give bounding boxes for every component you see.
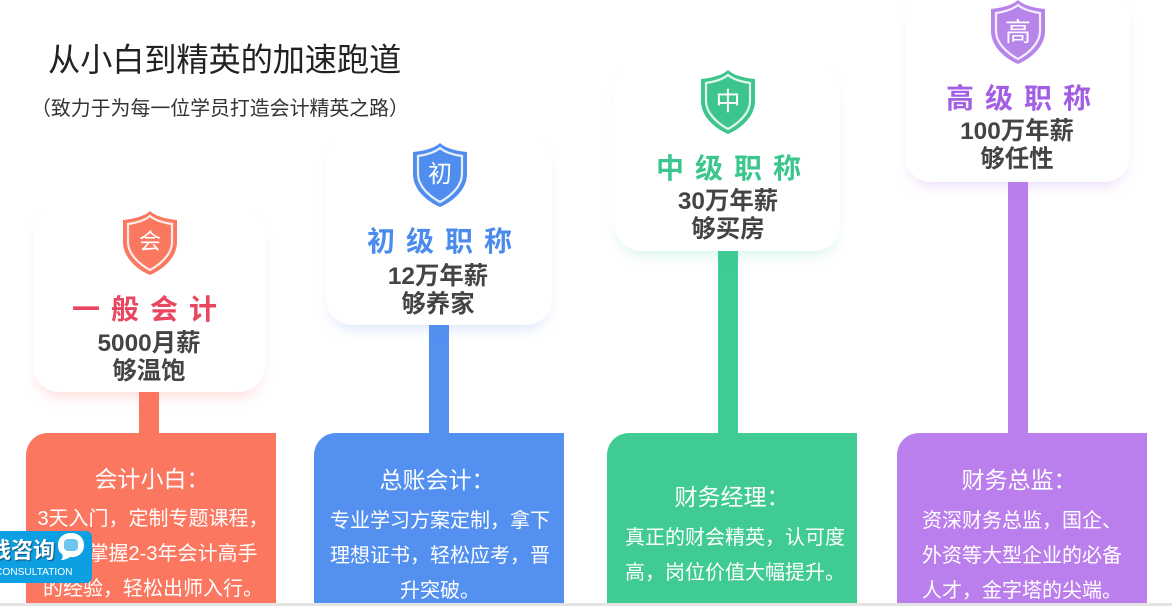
subtitle: （致力于为每一位学员打造会计精英之路） bbox=[31, 98, 409, 120]
card: 一般会计 bbox=[33, 205, 265, 392]
salary: 12万年薪 够养家: 够养家 bbox=[401, 291, 475, 318]
panel text: 快速掌握2-3年会计高手 bbox=[49, 543, 257, 565]
icon: shield 高 bbox=[991, 0, 1045, 64]
icon: shield 会 bbox=[123, 211, 177, 275]
panel text: 的经验，轻松出师入行。 bbox=[43, 578, 263, 600]
panel text: 人才，金字塔的尖端。 bbox=[922, 580, 1122, 602]
icon: speech bubble bbox=[58, 533, 84, 560]
card: 初级职称 bbox=[326, 135, 552, 325]
salary: 100万年薪 够任性: 够任性 bbox=[980, 146, 1054, 173]
icon: shield 高: 高 bbox=[1005, 17, 1031, 47]
panel text: 真正的财会精英，认可度 bbox=[625, 527, 845, 549]
bottom strip bbox=[0, 603, 1172, 606]
salary: 30万年薪 够买房: 30万年薪 bbox=[678, 188, 778, 215]
salary: 30万年薪 够买房: 够买房 bbox=[691, 216, 765, 243]
salary: 100万年薪 够任性 bbox=[960, 118, 1074, 173]
panel: 总账会计 bbox=[314, 433, 564, 603]
connector: 中级职称 bbox=[718, 245, 738, 435]
salary: 5000月薪 够温饱: 够温饱 bbox=[112, 358, 186, 385]
icon: shield 中: 中 bbox=[715, 88, 741, 116]
salary: 5000月薪 够温饱: 5000月薪 bbox=[97, 330, 201, 357]
card: 高级职称 bbox=[905, 0, 1130, 182]
panel heading: 财务经理： bbox=[674, 484, 790, 510]
panel text bbox=[330, 510, 550, 602]
connector: 一般会计 bbox=[139, 385, 159, 435]
panel text: 外资等大型企业的必备 bbox=[922, 545, 1122, 567]
panel heading: 总账会计： bbox=[380, 467, 494, 493]
consultation badge bbox=[0, 531, 92, 583]
panel heading: 财务总监： bbox=[962, 467, 1076, 493]
heading: 一般会计: 一般会计 bbox=[72, 294, 228, 325]
heading: 中级职称: 中级职称 bbox=[656, 153, 812, 184]
salary: 12万年薪 够养家: 12万年薪 bbox=[388, 263, 488, 290]
panel text: 升突破。 bbox=[400, 580, 480, 602]
icon: shield 中 bbox=[701, 70, 755, 134]
panel text: 高，岗位价值大幅提升。 bbox=[625, 562, 845, 584]
icon: shield 初: 初 bbox=[428, 161, 452, 188]
heading: 高级职称: 高级职称 bbox=[946, 83, 1102, 114]
heading: 初级职称: 初级职称 bbox=[367, 226, 523, 257]
connector: 初级职称 bbox=[429, 318, 449, 435]
panel text: 资深财务总监，国企、 bbox=[922, 510, 1122, 532]
panel heading: 会计小白： bbox=[94, 466, 210, 492]
title: 从小白到精英的加速跑道 bbox=[48, 42, 401, 78]
panel text: 专业学习方案定制，拿下 bbox=[330, 510, 550, 532]
panel text: 3天入门，定制专题课程， bbox=[37, 508, 269, 530]
card: 中级职称 bbox=[615, 62, 840, 251]
panel: 财务总监 bbox=[897, 433, 1147, 603]
salary: 100万年薪 够任性: 100万年薪 bbox=[960, 118, 1074, 145]
salary: 5000月薪 够温饱 bbox=[97, 330, 201, 385]
panel text: 理想证书，轻松应考，晋 bbox=[330, 545, 550, 567]
connector: 高级职称 bbox=[1008, 176, 1028, 435]
panel text bbox=[625, 527, 845, 584]
panel: 会计小白 bbox=[26, 433, 276, 603]
icon: shield 初 bbox=[413, 143, 467, 207]
salary: 12万年薪 够养家 bbox=[388, 262, 488, 318]
icon: shield 会: 会 bbox=[139, 229, 161, 254]
panel text bbox=[922, 510, 1122, 602]
salary: 30万年薪 够买房 bbox=[678, 188, 778, 243]
panel: 财务经理 bbox=[607, 433, 857, 603]
panel text bbox=[37, 508, 269, 600]
